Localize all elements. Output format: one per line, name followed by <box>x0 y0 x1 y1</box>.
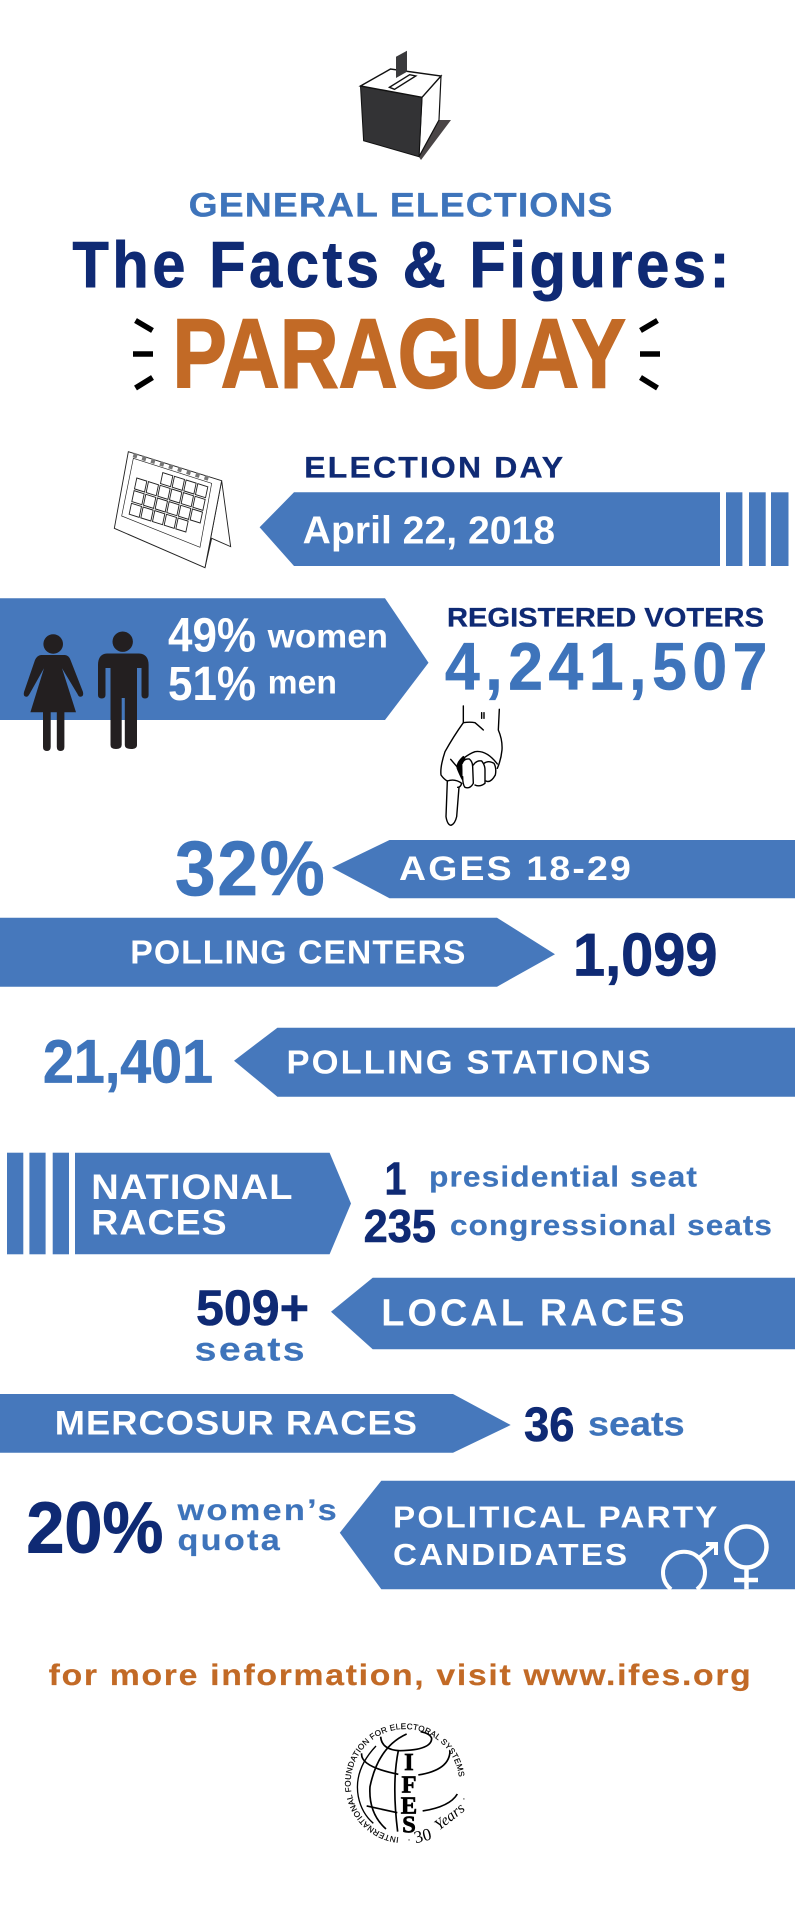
label: women: women <box>267 617 388 654</box>
logo: IFES: INTERNATIONAL FOUNDATION FOR ELECTORAL SYSTEMS <box>344 1723 464 1843</box>
icon: pointing hand <box>441 706 502 825</box>
panel: mercosur races ribbon <box>0 1394 511 1453</box>
stat: polling centers count: 1,099 <box>573 922 718 989</box>
stat: local seats: 509+ <box>196 1279 309 1336</box>
panel: political party candidates ribbon: POLITICAL PARTY <box>393 1499 720 1534</box>
stat: mercosur seats: 36 <box>524 1398 574 1452</box>
footer link text: for more information, visit www.ifes.org <box>49 1659 752 1692</box>
icon: ballot box <box>360 51 451 160</box>
panel: political party candidates ribbon: CANDIDATES <box>393 1537 629 1572</box>
logo letters: I <box>404 1749 414 1776</box>
logo letters: S <box>402 1812 416 1839</box>
label: women's: women’s <box>176 1494 339 1527</box>
panel: polling stations ribbon <box>234 1028 795 1097</box>
stat: youth share: 32% <box>175 826 326 912</box>
logo letters: F <box>401 1772 417 1799</box>
panel: ages ribbon: AGES 18-29 <box>399 850 633 888</box>
anniversary text: · <box>462 1795 466 1806</box>
icon: man <box>98 632 149 749</box>
globe lines <box>357 1732 457 1832</box>
label: men: men <box>268 663 337 700</box>
icon: woman <box>24 634 83 751</box>
icon: male symbol <box>663 1544 716 1589</box>
anniversary text: · <box>407 1835 411 1846</box>
panel: national races ribbon: NATIONAL <box>91 1167 294 1207</box>
anniversary text: 30 <box>412 1825 433 1847</box>
logo letters <box>401 1749 417 1839</box>
anniversary text: Years <box>431 1800 468 1834</box>
label: election day: ELECTION DAY <box>304 451 565 484</box>
stat: men percentage: 51% <box>168 658 256 711</box>
icon: calendar <box>114 452 231 568</box>
panel: election date ribbon <box>260 492 789 566</box>
stat: presidential seat count: 1 <box>384 1152 406 1204</box>
panel: polling centers ribbon <box>0 918 555 987</box>
icon: female symbol <box>727 1526 767 1589</box>
stat: polling stations count: 21,401 <box>43 1027 213 1095</box>
panel: polling stations ribbon: POLLING STATIONS <box>286 1044 653 1081</box>
panel: national races ribbon: RACES <box>91 1202 228 1242</box>
label: congressional seats: congressional seats <box>450 1210 773 1242</box>
stat: women's quota: 20% <box>26 1489 163 1569</box>
logo letters: E <box>401 1792 417 1819</box>
label: registered voters: REGISTERED VOTERS <box>447 603 764 633</box>
panel: local races ribbon: LOCAL RACES <box>381 1293 688 1335</box>
label: seats: seats <box>588 1406 685 1444</box>
subtitle: GENERAL ELECTIONS <box>189 186 614 224</box>
panel: polling centers ribbon: POLLING CENTERS <box>130 934 467 971</box>
circular organization name <box>351 1729 459 1837</box>
panel: national races ribbon <box>7 1153 351 1254</box>
label: presidential seat: presidential seat <box>429 1162 698 1194</box>
panel: election date ribbon: April 22, 2018 <box>303 509 555 552</box>
country heading: PARAGUAY <box>172 298 626 408</box>
panel: ages ribbon <box>332 840 795 898</box>
stat: women percentage: 49% <box>168 610 256 663</box>
stat: registered voters count: 4,241,507 <box>445 629 773 704</box>
panel: gender split ribbon <box>0 598 428 751</box>
panel: political party candidates ribbon <box>340 1481 795 1589</box>
label: seats: seats <box>195 1331 307 1368</box>
label: quota: quota <box>178 1524 282 1557</box>
panel: mercosur races ribbon: MERCOSUR RACES <box>55 1404 418 1442</box>
anniversary text <box>407 1795 468 1847</box>
title: The Facts & Figures: <box>72 228 733 301</box>
panel: local races ribbon <box>331 1278 795 1349</box>
decorative ticks around country name <box>133 320 660 388</box>
stat: congressional seats count: 235 <box>364 1200 436 1252</box>
